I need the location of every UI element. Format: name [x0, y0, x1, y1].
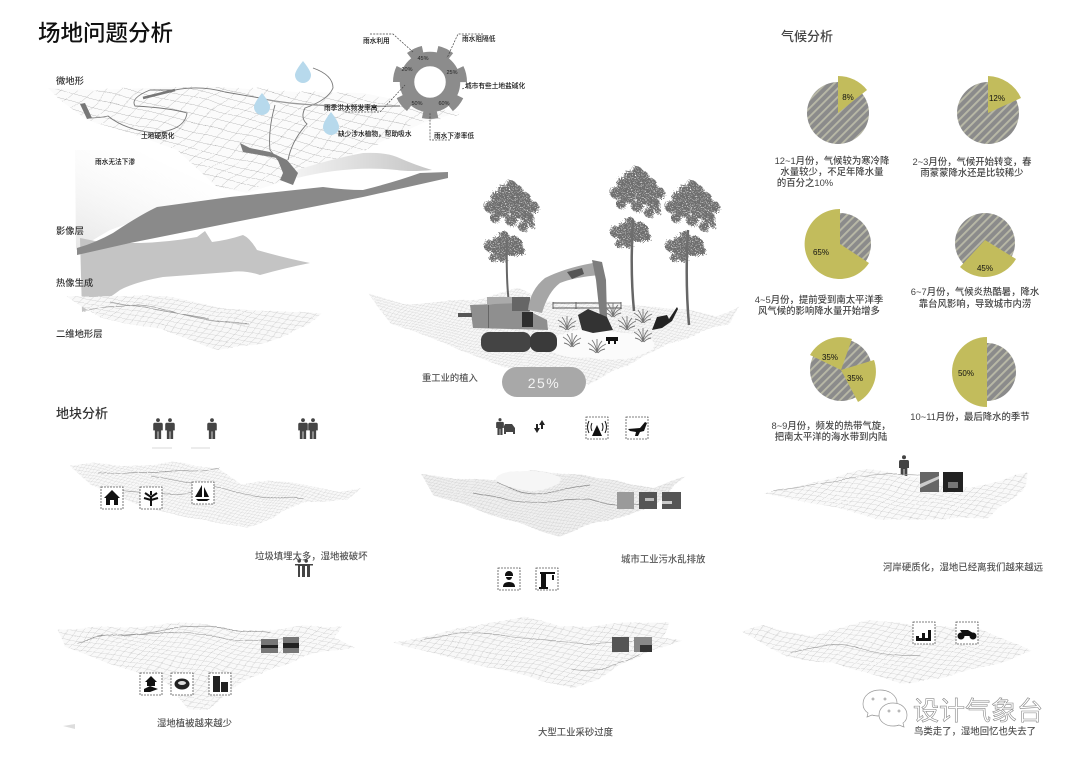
tree 2 [610, 166, 665, 311]
icon: wechat bubbles [863, 690, 907, 727]
icon: aircraft [626, 417, 648, 439]
terrain block 2 [420, 469, 688, 537]
gear labels: 城市有些土地盐碱化 [465, 81, 525, 90]
gear labels: 雨季洪水频发率高 [324, 103, 378, 112]
gear percents: 60% [438, 101, 450, 107]
icon: crane [536, 568, 558, 590]
icon: person with briefcase [899, 455, 909, 477]
gear labels [324, 34, 525, 140]
icon: house [101, 487, 123, 509]
percent pill: 25% [528, 375, 560, 391]
panel: micro terrain layers [48, 61, 460, 350]
pie: December-January [807, 76, 869, 144]
caption: 雨蒙蒙降水还是比较稀少 [920, 167, 1024, 178]
icon: hand with house [140, 673, 162, 695]
pie: June-July: 45% [977, 264, 993, 273]
layer label: 影像层: 影像层 [56, 225, 84, 236]
caption: 把南太平洋的海水带到内陆 [775, 431, 887, 442]
photo pair [920, 472, 963, 492]
title: 场地问题分析 [38, 21, 173, 46]
layer label: 热像生成: 热像生成 [56, 277, 93, 288]
caption: 重工业的植入: 重工业的植入 [422, 372, 478, 383]
icon: motorbike [956, 622, 978, 644]
gear percents: 45% [417, 56, 429, 62]
river channels [88, 68, 400, 170]
gear labels: 雨水阻隔低 [462, 34, 496, 43]
pie: April-May [805, 209, 871, 279]
terrain block 3 [762, 470, 1028, 520]
photo strip [617, 492, 681, 509]
river arrow [240, 143, 298, 185]
tree 3 [665, 180, 720, 325]
layer label: 二维地形层: 二维地形层 [56, 328, 102, 339]
icon: tree [140, 487, 162, 509]
heading: 气候分析 [781, 29, 833, 44]
pie: June-July [955, 213, 1016, 277]
gear percents [401, 56, 458, 107]
gear percents: 25% [446, 70, 458, 76]
terrain block 5 [393, 615, 681, 688]
icon: two people at table [295, 559, 313, 577]
grass clumps [558, 303, 652, 353]
icon: arrows [534, 420, 545, 433]
caption [755, 294, 884, 316]
gear diagram [324, 34, 525, 140]
gear labels: 缺少涉水植物，帮助吸水 [338, 129, 412, 138]
main terrain mesh [48, 87, 460, 193]
watermark text: 设计气象台 [913, 696, 1043, 726]
light gray thermal layer [80, 231, 310, 312]
caption: 4~5月份，提前受到南太平洋季 [755, 294, 884, 305]
percent pill [502, 367, 586, 397]
caption: 水量较少，不足年降水量 [780, 166, 884, 177]
dark gray band [77, 172, 448, 255]
caption: 大型工业采砂过度 [538, 726, 614, 738]
pie: August-September [810, 337, 876, 402]
pie: October-November: 50% [958, 369, 974, 378]
icon: radio tower [586, 417, 608, 439]
label: 土地硬质化: 土地硬质化 [141, 131, 175, 140]
fence [553, 302, 621, 309]
gear percents: 20% [401, 67, 413, 73]
caption: 10~11月份，最后降水的季节 [910, 411, 1030, 422]
panel: heavy industry scene [370, 166, 740, 397]
2D terrain mesh layer [67, 295, 323, 350]
small animal [606, 337, 618, 344]
pie: February-March [957, 76, 1021, 144]
caption [775, 155, 890, 188]
caption [912, 156, 1032, 178]
caption: 2~3月份，气候开始转变，春 [912, 156, 1032, 167]
panel: plot analysis [56, 406, 1044, 738]
icon: bar chart [913, 622, 935, 644]
people icons [153, 418, 318, 439]
gear labels: 雨水利用 [363, 36, 390, 45]
caption: 湿地植被越来越少 [157, 718, 232, 728]
gear percents: 50% [411, 101, 423, 107]
panel: climate analysis [755, 29, 1040, 442]
caption: 垃圾填埋太多，湿地被破坏 [255, 550, 368, 562]
pie: December-January: 8% [842, 93, 854, 102]
caption: 河岸硬质化，湿地已经离我们越来越远 [883, 562, 1044, 572]
heading: 地块分析 [56, 406, 108, 421]
layer label: 微地形: 微地形 [56, 75, 85, 86]
dashed leaders [345, 34, 483, 140]
pie: February-March: 12% [989, 94, 1005, 103]
caption: 12~1月份，气候较为寒冷降 [775, 155, 890, 166]
small stray terrain mark [63, 724, 75, 729]
caption [771, 420, 891, 442]
pie: August-September: 35% [822, 353, 838, 362]
caption: 靠台风影响，导致城市内涝 [919, 298, 1031, 309]
icon: worker [498, 568, 520, 590]
gradient fade under terrain [75, 150, 240, 250]
gear ring [407, 59, 453, 105]
photo pair [261, 637, 299, 653]
light gray band [297, 153, 432, 178]
caption: 鸟类走了，湿地回忆也失去了 [914, 726, 1036, 736]
river bank thick start [80, 103, 92, 119]
terrain block 1 [70, 463, 360, 528]
pie: October-November [952, 337, 1016, 407]
terrain block 4 [58, 623, 355, 710]
excavator [458, 260, 613, 352]
icon: buildings [209, 673, 231, 695]
underlines [152, 447, 210, 449]
ground mesh [370, 290, 740, 383]
shovel [652, 307, 678, 330]
terrain block 6 [743, 621, 1033, 683]
caption: 城市工业污水乱排放 [621, 554, 706, 564]
water drops [254, 61, 339, 135]
photo pair [612, 637, 652, 652]
pie: April-May: 65% [813, 248, 829, 257]
caption: 风气候的影响降水量开始增多 [758, 305, 880, 316]
icon: person and car [496, 418, 515, 435]
tree 1 [484, 180, 539, 303]
pie: August-September: 35% [847, 374, 863, 383]
label: 雨水无法下渗: 雨水无法下渗 [95, 157, 135, 166]
gear labels: 雨水下渗率低 [434, 131, 474, 140]
caption: 8~9月份，频发的热带气旋， [771, 420, 891, 431]
caption: 6~7月份，气候炎热酷暑，降水 [911, 286, 1040, 297]
gear teeth [390, 42, 470, 122]
icon: sailboat [192, 482, 214, 504]
icon: nest [171, 673, 193, 695]
caption: 的百分之10% [777, 177, 833, 188]
caption [911, 286, 1040, 309]
watermark [863, 690, 1043, 727]
